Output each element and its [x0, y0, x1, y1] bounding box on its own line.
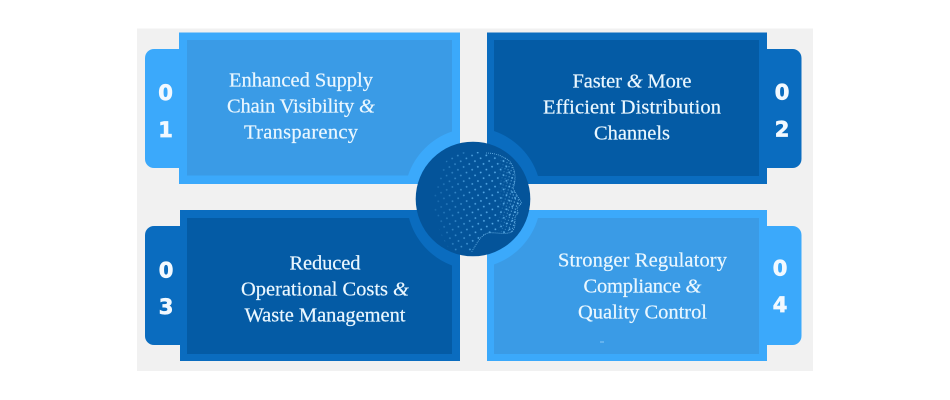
number tab 03 [145, 226, 181, 345]
inner card 04 [494, 218, 759, 354]
panel: 04 regulatory compliance [487, 210, 802, 361]
inner card 02 [494, 40, 759, 176]
text 03: Operational Costs & [241, 278, 409, 300]
number 04: 4 [773, 293, 787, 317]
head dots sparse [434, 152, 522, 252]
text 03 [241, 252, 409, 326]
circle badge [416, 142, 530, 256]
text 04 [558, 250, 728, 324]
number tab 01 [145, 49, 180, 168]
number 02: 2 [775, 118, 789, 142]
text 04: Compliance & [584, 276, 702, 298]
outer frame 02 [487, 32, 767, 184]
number 04: 0 [773, 256, 787, 280]
number 03 [159, 258, 173, 319]
text 02: Efficient Distribution [543, 96, 721, 118]
text 02: Faster & More [572, 70, 692, 92]
number tab 04 [766, 226, 802, 345]
small speck [600, 342, 604, 343]
number tab 02 [766, 49, 802, 168]
text 01: Chain Visibility & [227, 96, 375, 118]
text 01: Enhanced Supply [229, 70, 374, 92]
number 01 [158, 81, 173, 142]
head dots dense [498, 156, 521, 234]
panel: 01 supply chain visibility [145, 32, 460, 184]
outer frame 01 [179, 32, 460, 184]
number 03: 0 [159, 258, 173, 282]
inner card 03 [187, 218, 452, 354]
text 04: Quality Control [578, 302, 707, 324]
panel: 02 distribution channels [487, 32, 802, 184]
text 03: Reduced [290, 252, 360, 274]
outer frame 03 [180, 210, 460, 361]
number 02: 0 [775, 80, 789, 104]
panel: 03 operational costs [145, 210, 460, 361]
text 02 [543, 70, 721, 144]
face outline dots [472, 153, 522, 252]
text 02: Channels [594, 122, 670, 144]
text 04: Stronger Regulatory [558, 250, 728, 272]
number 01: 1 [158, 118, 173, 142]
text 03: Waste Management [244, 304, 406, 326]
text 01 [227, 70, 375, 144]
number 03: 3 [159, 295, 173, 319]
inner card 01 [187, 40, 452, 176]
number 04 [773, 256, 787, 317]
number 01: 0 [158, 81, 173, 105]
number 02 [775, 80, 789, 142]
central AI head icon [416, 142, 530, 256]
text 01: Transparency [244, 122, 359, 144]
outer frame 04 [487, 210, 767, 361]
background panel [137, 28, 813, 371]
